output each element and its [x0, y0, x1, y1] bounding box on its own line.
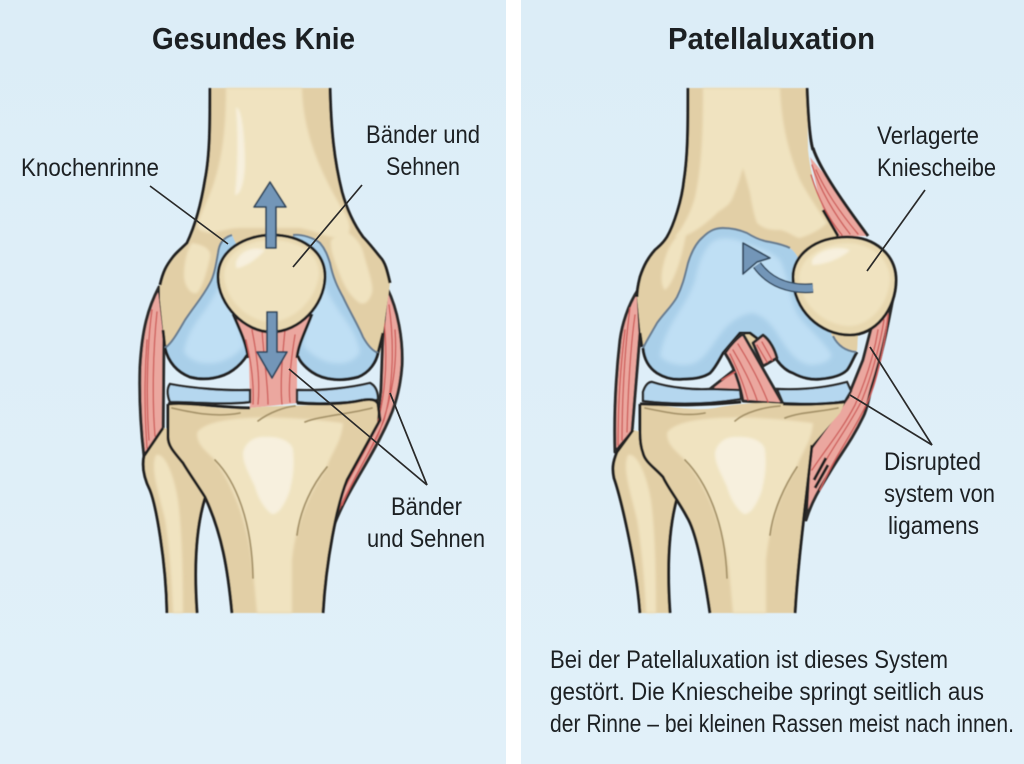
- femoral cartilage right: [285, 235, 378, 380]
- label: Verlagerte Kniescheibe: [867, 122, 996, 271]
- label: Bänder und Sehnen (top): Bänder und: [366, 121, 480, 149]
- arrow: down: [257, 312, 287, 378]
- patella: [218, 235, 325, 332]
- outer ligament right: [330, 288, 402, 528]
- label: Knochenrinne: [21, 154, 228, 244]
- label: Knochenrinne: Knochenrinne: [21, 154, 159, 182]
- label: Disrupted system von ligamens: ligamens: [888, 512, 979, 540]
- outer ligament left: [615, 290, 640, 452]
- meniscus right: [297, 383, 378, 403]
- central patellar ligament: [233, 313, 312, 408]
- crossed ligaments: [710, 334, 783, 404]
- arrow: displacement: [743, 243, 813, 288]
- label: Disrupted system von ligamens: Disrupted: [884, 448, 981, 476]
- tibia: [168, 399, 380, 613]
- panel: patellar luxation: [521, 0, 1024, 764]
- text block: explanation: [550, 646, 1014, 738]
- text block: explanation: gestört. Die Kniescheibe springt seitlich aus: [550, 678, 984, 706]
- label: Verlagerte Kniescheibe: Verlagerte: [877, 122, 979, 150]
- illustration: healthy knee joint: [140, 88, 402, 613]
- label: Bänder und Sehnen (top): [293, 121, 480, 267]
- label: Verlagerte Kniescheibe: Kniescheibe: [877, 154, 996, 182]
- displaced patella: [793, 237, 896, 335]
- tibia: [640, 402, 845, 613]
- illustration: luxated knee joint: [613, 88, 896, 613]
- upper ligament right: [810, 148, 868, 236]
- femur: [637, 88, 870, 350]
- femoral cartilage left: [165, 235, 262, 379]
- text block: explanation: Bei der Patellaluxation ist dieses System: [550, 646, 948, 674]
- title: Patellaluxation: Patellaluxation: [668, 21, 875, 56]
- fibula: [143, 428, 205, 613]
- femoral cartilage: [643, 228, 858, 379]
- title: Gesundes Knie: Gesundes Knie: [152, 21, 355, 56]
- outer ligament left: [140, 287, 164, 456]
- label: Disrupted system von ligamens: system von: [884, 480, 995, 508]
- panel: healthy knee: [0, 0, 506, 764]
- femur: [160, 88, 390, 353]
- label: Bänder und Sehnen (top): Sehnen: [386, 153, 460, 181]
- meniscus left: [643, 382, 741, 403]
- meniscus right: [777, 382, 851, 404]
- label: Bänder und Sehnen (bottom): [289, 369, 485, 553]
- label: Bänder und Sehnen (bottom): Bänder: [391, 493, 462, 521]
- outer ligament right: [806, 298, 893, 520]
- meniscus left: [168, 384, 250, 403]
- arrow: up: [254, 182, 286, 248]
- label: Disrupted system von ligamens: [850, 347, 995, 540]
- label: Bänder und Sehnen (bottom): und Sehnen: [367, 525, 485, 553]
- fibula: [613, 430, 677, 613]
